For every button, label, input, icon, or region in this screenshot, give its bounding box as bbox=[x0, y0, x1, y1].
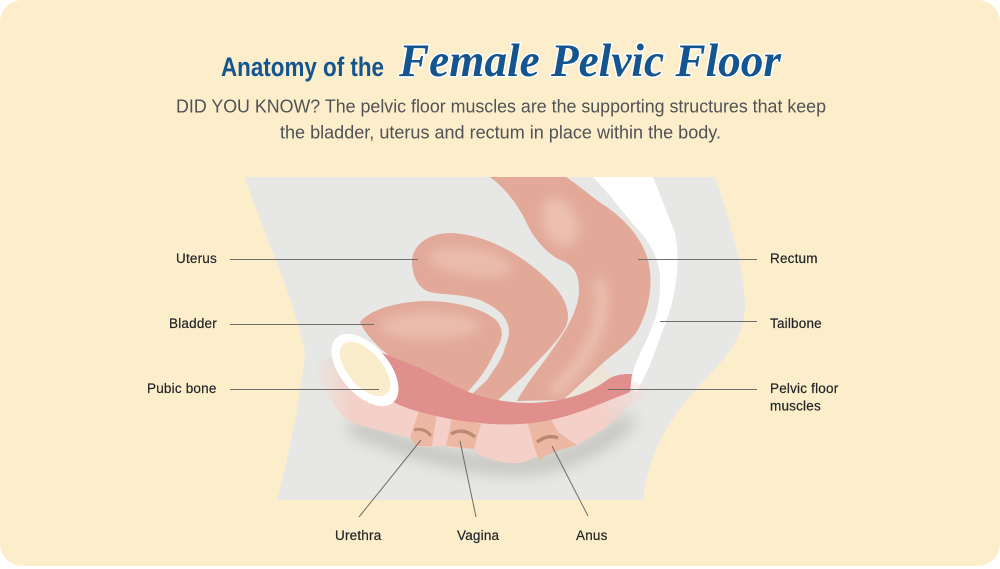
title: Anatomy of the: Anatomy of the bbox=[221, 52, 384, 82]
anus arc bbox=[537, 437, 558, 442]
intro text: the bladder, uterus and rectum in place within the body. bbox=[280, 122, 721, 142]
vagina arc bbox=[451, 431, 475, 437]
label: Urethra: Urethra bbox=[335, 528, 382, 543]
urethra arc bbox=[414, 429, 431, 436]
label: Pelvic floor muscles: Pelvic floor bbox=[770, 381, 838, 396]
rectum bbox=[490, 177, 651, 401]
label: Rectum: Rectum bbox=[770, 251, 818, 266]
intro text bbox=[176, 96, 826, 142]
pubic bone inner bbox=[331, 333, 399, 405]
connective tissue bbox=[563, 364, 612, 400]
label: Pubic bone: Pubic bone bbox=[147, 381, 217, 396]
bladder bbox=[360, 301, 502, 394]
anus bbox=[527, 418, 577, 461]
uterus and vaginal canal bbox=[412, 233, 568, 401]
title bbox=[221, 35, 782, 87]
label: Bladder: Bladder bbox=[169, 316, 217, 331]
anatomy illustration bbox=[245, 177, 745, 500]
body silhouette bbox=[245, 177, 745, 500]
tailbone bbox=[593, 177, 678, 392]
pubic bone bbox=[319, 322, 411, 418]
perineum soft tissue bbox=[315, 350, 655, 463]
shadow under pelvis bbox=[350, 418, 630, 465]
vagina bbox=[446, 418, 481, 449]
urethra bbox=[410, 408, 437, 446]
bladder highlight bbox=[380, 312, 480, 340]
label: Tailbone: Tailbone bbox=[770, 316, 822, 331]
pelvic floor muscles bbox=[367, 347, 632, 424]
labels bbox=[147, 251, 839, 543]
rectum highlights bbox=[535, 192, 585, 252]
intro text: DID YOU KNOW? The pelvic floor muscles are the supporting structures that keep bbox=[176, 96, 826, 116]
leader lines bbox=[230, 260, 757, 517]
label: Vagina: Vagina bbox=[457, 528, 500, 543]
label: Uterus: Uterus bbox=[176, 251, 217, 266]
uterus highlight bbox=[426, 242, 514, 282]
label: Pelvic floor muscles: muscles bbox=[770, 398, 821, 414]
label: Anus: Anus bbox=[576, 528, 608, 543]
title: Female Pelvic Floor: Female Pelvic Floor bbox=[398, 35, 782, 87]
